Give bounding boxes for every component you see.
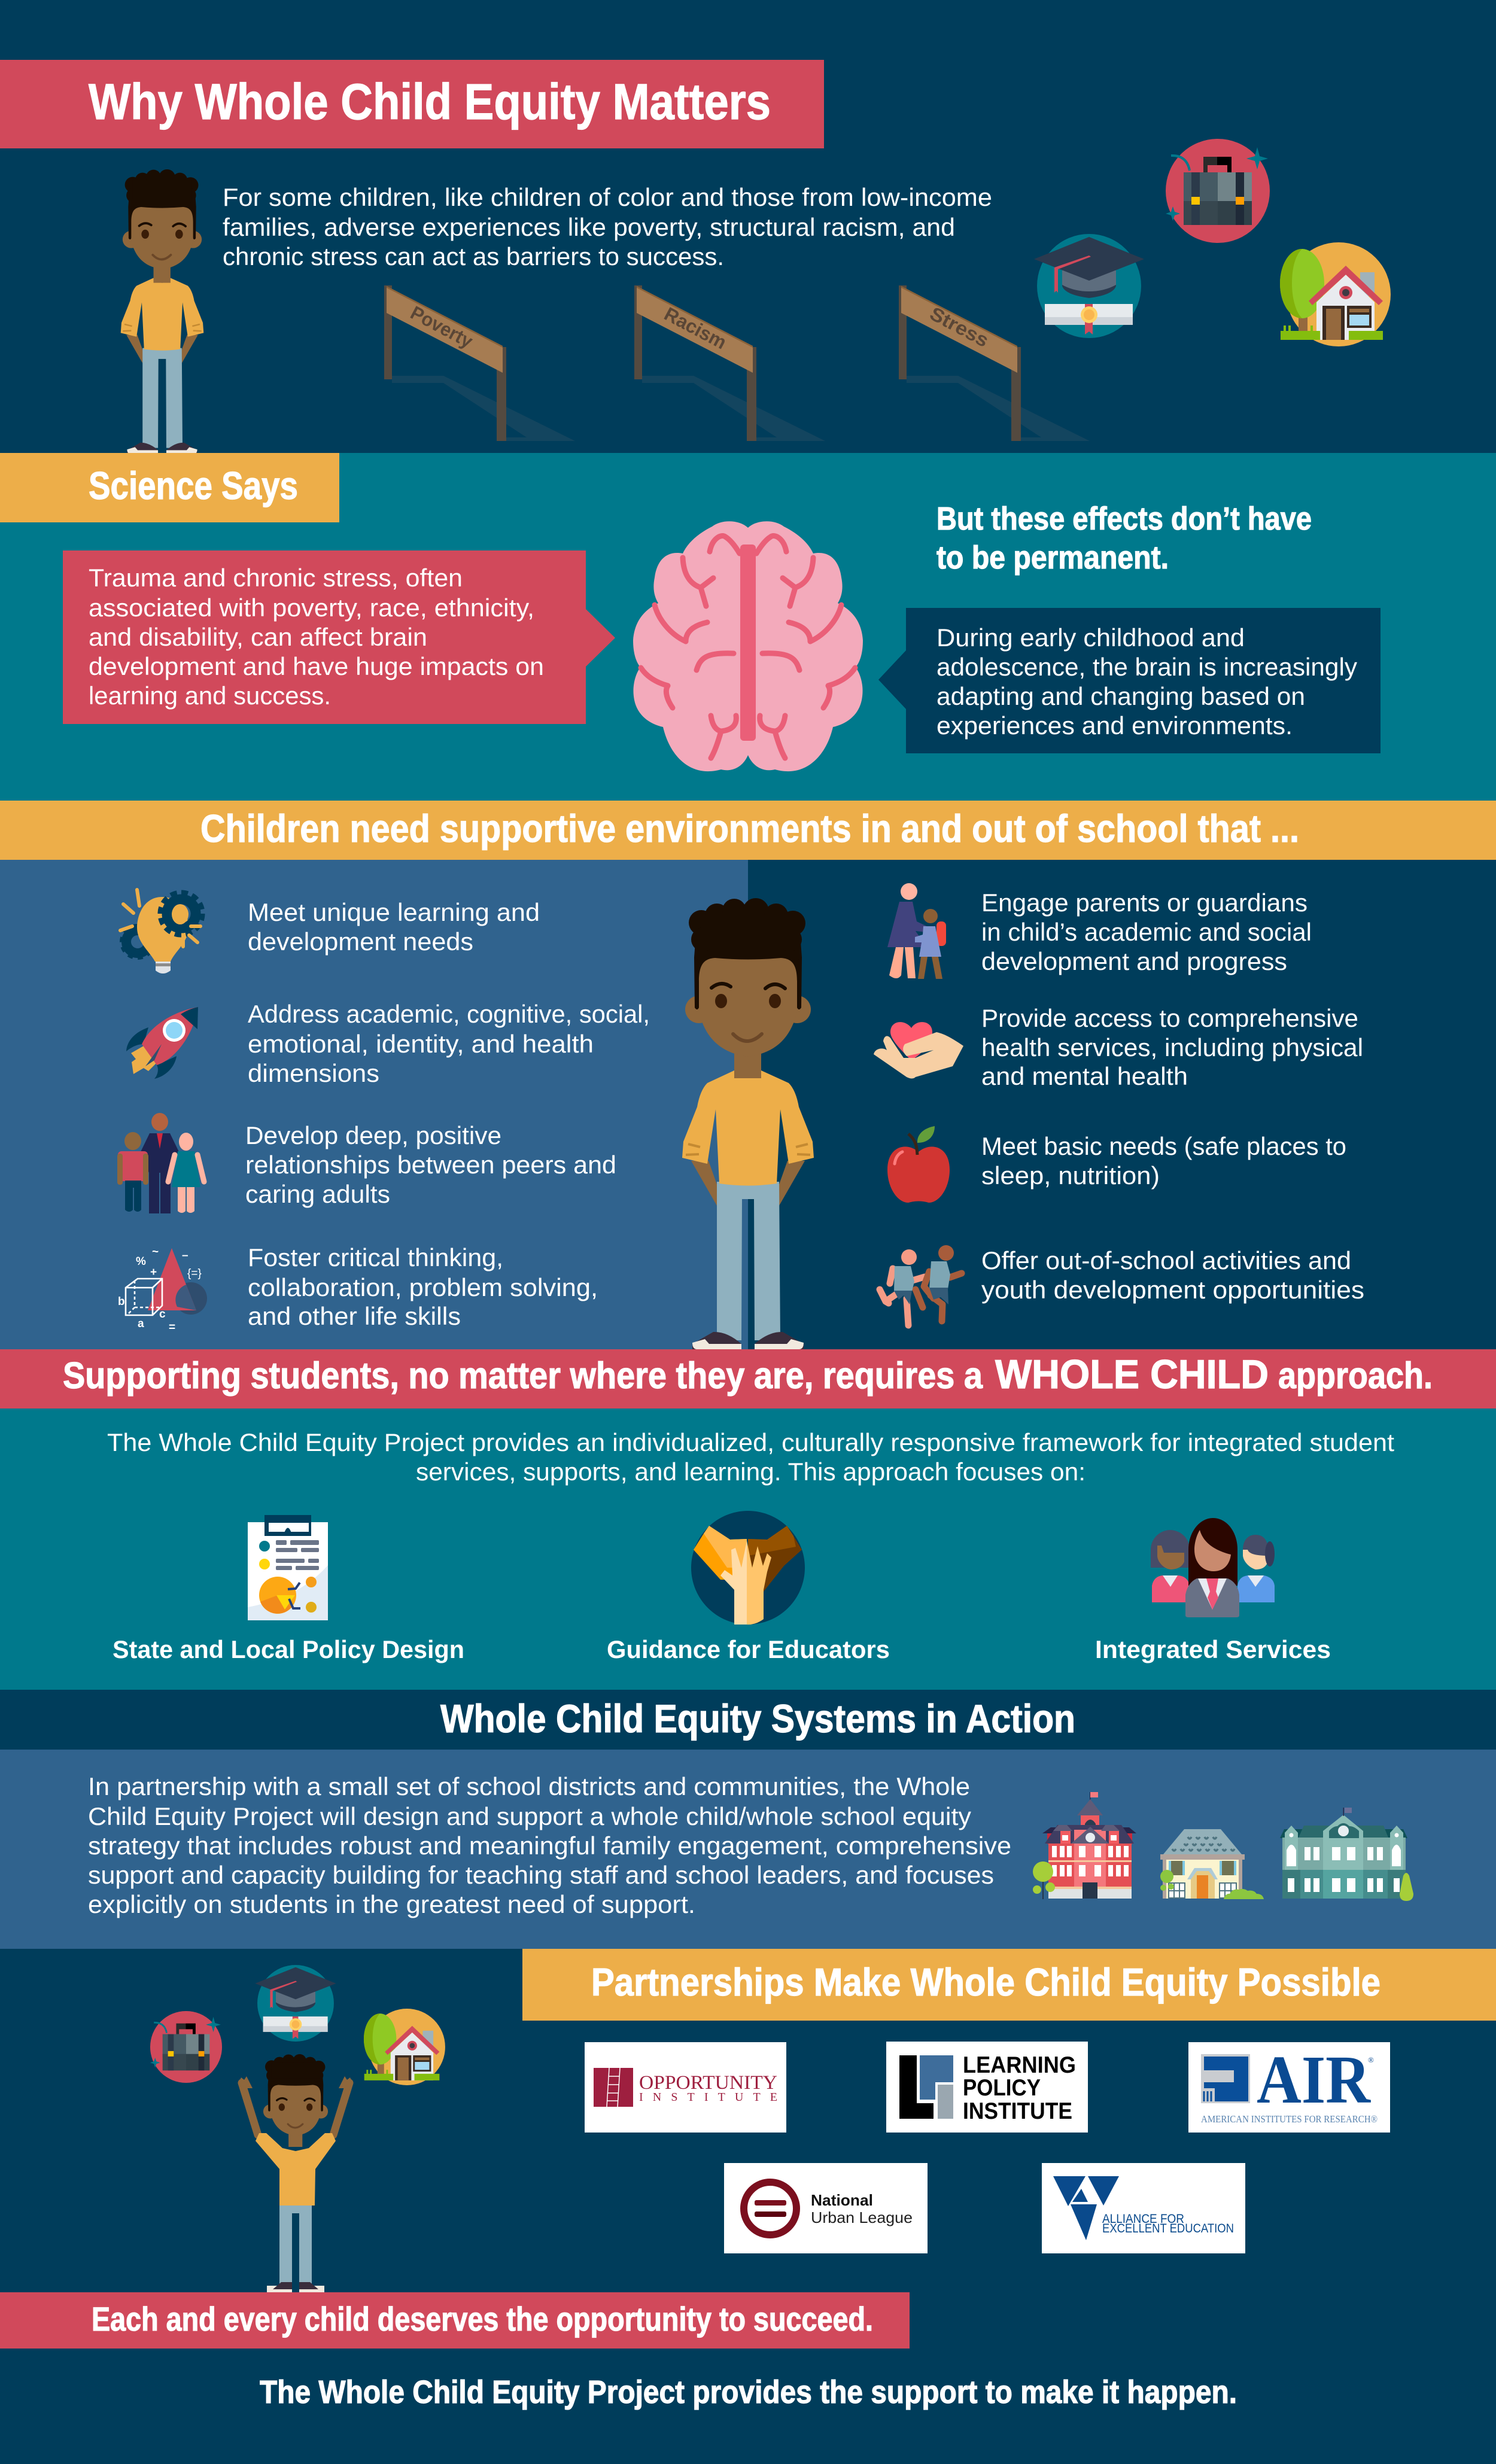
- icon: red school building: [1033, 1792, 1136, 1899]
- callout: brain adapting: experiences and environments.: [936, 711, 1293, 740]
- text: address academic: [248, 1000, 650, 1087]
- label: integrated services: Integrated Services: [1095, 1635, 1331, 1663]
- text: health services: and mental health: [981, 1062, 1188, 1090]
- icon: geometry and math: c: [159, 1308, 166, 1321]
- text: engage parents: [981, 889, 1312, 975]
- text: health services: health services, including physical: [981, 1033, 1363, 1061]
- heading: science says: [0, 453, 339, 522]
- text: basic needs: Meet basic needs (safe places to: [981, 1132, 1346, 1160]
- text: engage parents: in child’s academic and social: [981, 918, 1312, 946]
- callout: brain adapting: adolescence, the brain is increasingly: [936, 653, 1357, 681]
- icon: green school building: [1280, 1808, 1413, 1901]
- icon: family group: [117, 1113, 204, 1213]
- icon: house: [1280, 242, 1391, 346]
- closing banner: every child: Each and every child deserves the opportunity to succeed.: [92, 2300, 873, 2338]
- intro paragraph: chronic stress can act as barriers to success.: [223, 242, 724, 270]
- logo: opportunity institute: INSTITUTE: [639, 2091, 777, 2104]
- text: out-of-school activities: [981, 1246, 1364, 1304]
- icon: cream house: [1160, 1829, 1264, 1899]
- callout: trauma and chronic stress: associated with poverty, race, ethnicity,: [89, 594, 534, 622]
- heading: partnerships: [522, 1949, 1496, 2021]
- icon: geometry and math: a: [138, 1318, 144, 1330]
- heading band: systems in action: Whole Child Equity Systems in Action: [440, 1696, 1075, 1741]
- logo: learning policy institute: LEARNING: [963, 2052, 1076, 2078]
- icon: small briefcase: [150, 2011, 222, 2083]
- icon: small house: [364, 2009, 445, 2085]
- icon: geometry and math: =: [169, 1321, 175, 1334]
- text: critical thinking: Foster critical thinking,: [248, 1243, 503, 1271]
- text: framework intro: The Whole Child Equity Project provides an individualized, culturally responsive framework for integrated student: [107, 1428, 1394, 1456]
- text: framework intro: [107, 1428, 1394, 1486]
- text: partnership paragraph: strategy that includes robust and meaningful family engagement, comprehensive: [88, 1832, 1011, 1860]
- text: critical thinking: [248, 1243, 598, 1330]
- callout: brain adapting: adapting and changing based on: [936, 682, 1305, 710]
- callout: brain adapting: During early childhood and: [936, 623, 1245, 652]
- callout: trauma and chronic stress: Trauma and chronic stress, often: [89, 564, 463, 592]
- text: meet unique learning: Meet unique learning and: [248, 898, 540, 926]
- logo: learning policy institute: POLICY: [963, 2075, 1041, 2101]
- heading: science says: Science Says: [89, 464, 298, 507]
- text: meet unique learning: development needs: [248, 927, 473, 956]
- icon: geometry and math: %: [136, 1255, 146, 1268]
- heading: effects not permanent: to be permanent.: [936, 540, 1169, 576]
- logo: american institutes for research: [1188, 2042, 1390, 2133]
- hurdle: racism: [634, 285, 825, 441]
- label: policy design: State and Local Policy Design: [112, 1635, 464, 1663]
- heading band: whole child approach: approach.: [1278, 1355, 1433, 1397]
- text: address academic: emotional, identity, and health: [248, 1030, 594, 1058]
- logo: opportunity institute: OPPORTUNITY: [639, 2072, 777, 2094]
- text: deep relationships: caring adults: [245, 1180, 390, 1208]
- icon: small graduation cap: [255, 1965, 336, 2042]
- callout: trauma and chronic stress: [63, 550, 615, 724]
- text: meet unique learning: [248, 898, 540, 956]
- text: address academic: dimensions: [248, 1059, 379, 1087]
- icon: geometry and math: ~: [152, 1246, 159, 1258]
- text: partnership paragraph: [88, 1772, 1011, 1918]
- icon: rocket: [126, 1007, 198, 1079]
- panel: science says: [0, 453, 1496, 801]
- closing banner: every child: [0, 2292, 910, 2349]
- title banner: [0, 60, 824, 148]
- text: partnership paragraph: Child Equity Project will design and support a whole child/whole school equity: [88, 1802, 971, 1830]
- panel: partnerships: [150, 1949, 1496, 2292]
- icon: parent and child: [887, 883, 946, 979]
- text: health services: Provide access to comprehensive: [981, 1004, 1358, 1032]
- heading: effects not permanent: [936, 501, 1312, 576]
- text: framework intro: services, supports, and learning. This approach focuses on:: [416, 1458, 1085, 1486]
- icon: graduation cap and diploma: [1034, 234, 1144, 338]
- logo: alliance for excellent education: ALLIANCE FOR: [1102, 2212, 1184, 2226]
- icon: brain: [633, 521, 863, 771]
- heading band: systems in action: [0, 1690, 1496, 1750]
- logo: alliance for excellent education: [1042, 2163, 1245, 2253]
- icon: apple: [887, 1126, 950, 1203]
- icon: heart in hand: [874, 1022, 963, 1078]
- logo: learning policy institute: [886, 2042, 1088, 2133]
- logo: national urban league: National: [811, 2191, 873, 2209]
- text: deep relationships: [245, 1121, 616, 1208]
- illustration: child with raised arms: [239, 2054, 352, 2292]
- text: out-of-school activities: Offer out-of-school activities and: [981, 1246, 1351, 1274]
- intro paragraph: [223, 183, 992, 270]
- icon: three professionals: [1151, 1518, 1275, 1617]
- hurdle: stress: Stress: [926, 303, 992, 351]
- hurdle: stress: [899, 285, 1090, 441]
- text: partnership paragraph: In partnership with a small set of school districts and communities, the Whole: [88, 1772, 970, 1800]
- illustration: large child: [682, 898, 814, 1349]
- panel: why whole child equity matters: [0, 60, 1391, 454]
- text: basic needs: [981, 1132, 1346, 1190]
- hurdle: poverty: Poverty: [407, 302, 476, 352]
- icon: geometry and math: b: [118, 1295, 125, 1308]
- logo: alliance for excellent education: EXCELLENT EDUCATION: [1102, 2222, 1234, 2235]
- callout: trauma and chronic stress: development and have huge impacts on: [89, 652, 544, 680]
- text: critical thinking: collaboration, problem solving,: [248, 1273, 598, 1301]
- label: guidance for educators: Guidance for Educators: [607, 1635, 890, 1663]
- heading band: supportive environments: Children need supportive environments in and out of school that ...: [200, 807, 1299, 850]
- heading: partnerships: Partnerships Make Whole Child Equity Possible: [591, 1960, 1381, 2004]
- icon: joined hands: [691, 1511, 805, 1625]
- icon: geometry and math: {=}: [187, 1267, 202, 1280]
- text: basic needs: sleep, nutrition): [981, 1161, 1160, 1190]
- text: health services: [981, 1004, 1363, 1090]
- heading band: supportive environments: [0, 801, 1496, 860]
- intro paragraph: families, adverse experiences like poverty, structural racism, and: [223, 213, 955, 241]
- heading: effects not permanent: But these effects don’t have: [936, 501, 1312, 537]
- icon: policy document: [248, 1515, 328, 1620]
- icon: geometry and math: +: [150, 1266, 157, 1279]
- logo: national urban league: Urban League: [811, 2209, 913, 2226]
- text: engage parents: development and progress: [981, 947, 1287, 975]
- hurdle: racism: Racism: [661, 303, 730, 353]
- logo: national urban league: [724, 2163, 928, 2253]
- intro paragraph: For some children, like children of color and those from low-income: [223, 183, 992, 211]
- callout: trauma and chronic stress: and disability, can affect brain: [89, 623, 427, 651]
- icon: geometry and math: –: [182, 1249, 188, 1262]
- heading band: whole child approach: WHOLE CHILD: [995, 1352, 1269, 1397]
- hurdle: poverty: [384, 285, 575, 441]
- panel: supportive environments: [0, 860, 1496, 1349]
- text: address academic: Address academic, cognitive, social,: [248, 1000, 650, 1028]
- logo: learning policy institute: INSTITUTE: [963, 2098, 1072, 2124]
- icon: briefcase: [1166, 139, 1270, 243]
- logo: opportunity institute: [585, 2042, 786, 2133]
- title banner: Why Whole Child Equity Matters: [89, 74, 771, 130]
- callout: brain adapting: [878, 608, 1381, 753]
- text: partnership paragraph: support and capacity building for teaching staff and school leaders, and focuses: [88, 1861, 994, 1889]
- illustration: standing child: [121, 169, 203, 454]
- panel: whole child framework: [0, 1409, 1496, 1690]
- text: deep relationships: Develop deep, positive: [245, 1121, 501, 1149]
- text: critical thinking: and other life skills: [248, 1302, 461, 1330]
- icon: geometry and math: [118, 1246, 207, 1334]
- text: deep relationships: relationships between peers and: [245, 1151, 616, 1179]
- logo: american institutes for research: AIR: [1257, 2042, 1372, 2118]
- icon: light bulb and gears: [120, 890, 202, 974]
- panel: systems in action: [0, 1750, 1496, 1949]
- closing statement: The Whole Child Equity Project provides the support to make it happen.: [260, 2374, 1237, 2410]
- logo: american institutes for research: ®: [1368, 2055, 1374, 2064]
- text: engage parents: Engage parents or guardians: [981, 889, 1308, 917]
- callout: trauma and chronic stress: learning and success.: [89, 682, 331, 710]
- text: partnership paragraph: explicitly on students in the greatest need of support.: [88, 1890, 695, 1918]
- heading band: whole child approach: [0, 1349, 1496, 1409]
- icon: running children: [880, 1245, 962, 1325]
- logo: american institutes for research: AMERICAN INSTITUTES FOR RESEARCH®: [1201, 2113, 1378, 2125]
- heading band: whole child approach: Supporting students, no matter where they are, requires a: [63, 1355, 983, 1397]
- text: out-of-school activities: youth development opportunities: [981, 1276, 1364, 1304]
